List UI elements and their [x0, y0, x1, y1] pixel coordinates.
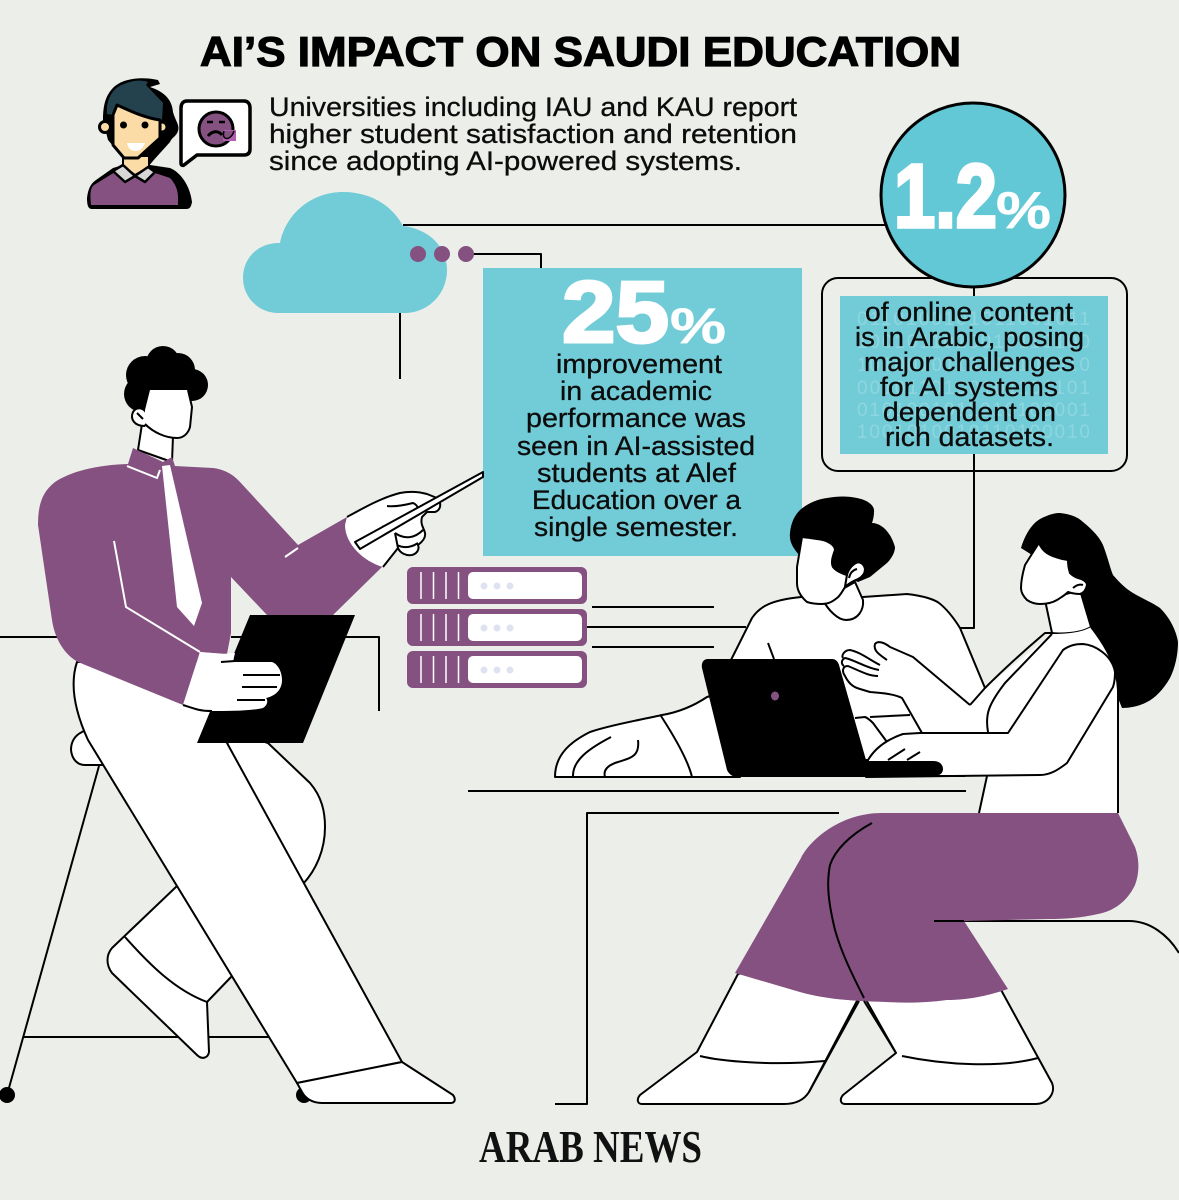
connector lines	[0, 225, 1179, 1104]
laptop base	[866, 761, 965, 777]
avatar shirt	[90, 172, 178, 205]
panel text: is in Arabic, posing	[855, 322, 1084, 352]
panel text: seen in AI-assisted	[517, 431, 755, 461]
icon: server stack	[407, 567, 587, 688]
icon: cloud	[243, 192, 447, 313]
raised hand	[842, 642, 970, 733]
hair	[1021, 513, 1178, 708]
ear	[845, 562, 865, 587]
avatar face	[113, 105, 160, 158]
left leg	[638, 960, 868, 1104]
shirt crease	[768, 643, 774, 659]
avatar ears	[100, 122, 167, 132]
avatar eyes and smile	[120, 122, 148, 151]
stat: 25%: 25	[562, 264, 669, 361]
hair	[790, 496, 895, 582]
forearm on table	[555, 690, 740, 777]
title: AI’S IMPACT ON SAUDI EDUCATION	[200, 28, 961, 75]
stat: 25%	[562, 264, 726, 361]
server 1	[407, 567, 587, 604]
binary pattern: 0101001011010100001	[857, 400, 1090, 421]
icon: student avatar with speech bubble	[87, 78, 250, 209]
binary pattern: 1001010010110100010	[857, 422, 1090, 443]
binary pattern: 1001011010010110100	[857, 332, 1090, 353]
right leg	[841, 965, 1053, 1104]
face	[145, 390, 192, 438]
avatar collar	[113, 165, 155, 182]
left hand	[183, 652, 282, 711]
panel: 25 percent	[483, 264, 802, 556]
server 2	[407, 609, 587, 646]
panel text	[517, 349, 755, 542]
neck	[823, 582, 863, 620]
stat circle	[881, 103, 1065, 287]
stat: 1.2%: 1.2	[894, 147, 997, 247]
ear detail	[1073, 585, 1083, 588]
hair	[124, 346, 208, 412]
shirt creases	[114, 466, 298, 652]
face	[1021, 543, 1087, 604]
panel text: for AI systems	[880, 372, 1058, 402]
intro text	[269, 92, 798, 176]
stool	[0, 725, 312, 1103]
rounded frame	[822, 278, 1127, 471]
body outline	[970, 627, 1118, 813]
face outline	[137, 390, 192, 438]
intro text: Universities including IAU and KAU report	[269, 92, 798, 122]
intro text: higher student satisfaction and retention	[269, 119, 797, 149]
right hand	[345, 492, 440, 567]
binary pattern: 0010110100101101101	[857, 378, 1090, 399]
panel text: students at Alef	[537, 458, 737, 488]
neck	[1045, 590, 1091, 633]
panel text: improvement	[556, 349, 723, 379]
stat: 25%: %	[670, 298, 726, 354]
figure: presenter man	[0, 346, 483, 1103]
clipboard	[197, 615, 355, 743]
front shoe	[297, 1062, 455, 1103]
face	[797, 537, 847, 604]
panel background	[483, 268, 802, 556]
logo: Arab News: ARAB NEWS	[479, 1121, 702, 1172]
panel: 1.2 percent	[822, 103, 1127, 471]
intro text: since adopting AI-powered systems.	[269, 146, 742, 176]
avatar neck	[123, 156, 149, 175]
stat: 1.2%: %	[996, 182, 1051, 240]
panel text: dependent on	[883, 397, 1056, 427]
shirt	[38, 448, 382, 705]
avatar hair	[103, 78, 178, 167]
panel text	[855, 297, 1084, 452]
binary pattern: 0110100101011001011	[857, 309, 1090, 330]
speech bubble	[181, 101, 250, 165]
panel text: of online content	[865, 297, 1074, 327]
front leg	[74, 660, 402, 1083]
inner knee lines	[855, 715, 910, 742]
figure: student woman	[638, 513, 1178, 1104]
panel text: in academic	[560, 376, 712, 406]
body	[866, 627, 1118, 813]
binary pattern: 1010010110100101010	[857, 355, 1090, 376]
panel text: rich datasets.	[885, 422, 1054, 452]
chair line over skirt	[934, 920, 964, 922]
avatar body	[87, 165, 192, 209]
panel text: major challenges	[864, 347, 1075, 377]
tie	[162, 465, 202, 626]
text background	[840, 296, 1108, 454]
skirt fold line	[828, 823, 872, 998]
panel text: single semester.	[534, 512, 738, 542]
laptop	[702, 659, 866, 777]
finger lines	[888, 749, 920, 760]
ear	[132, 408, 146, 426]
back thigh	[200, 720, 325, 900]
torso	[731, 594, 985, 760]
ear detail	[849, 569, 857, 578]
neck	[138, 424, 173, 462]
sad face	[199, 112, 236, 146]
cloud dots	[410, 246, 474, 262]
avatar hair highlight	[107, 81, 163, 120]
pointer	[355, 472, 483, 549]
panel text: performance was	[526, 403, 746, 433]
skirt	[735, 813, 1138, 1003]
lower arm	[866, 644, 1115, 777]
figure: student man	[555, 496, 985, 777]
back leg	[108, 886, 250, 1058]
panel text: Education over a	[532, 485, 742, 515]
leg divider	[809, 1001, 896, 1092]
server 3	[407, 651, 587, 688]
binary pattern	[857, 309, 1090, 443]
